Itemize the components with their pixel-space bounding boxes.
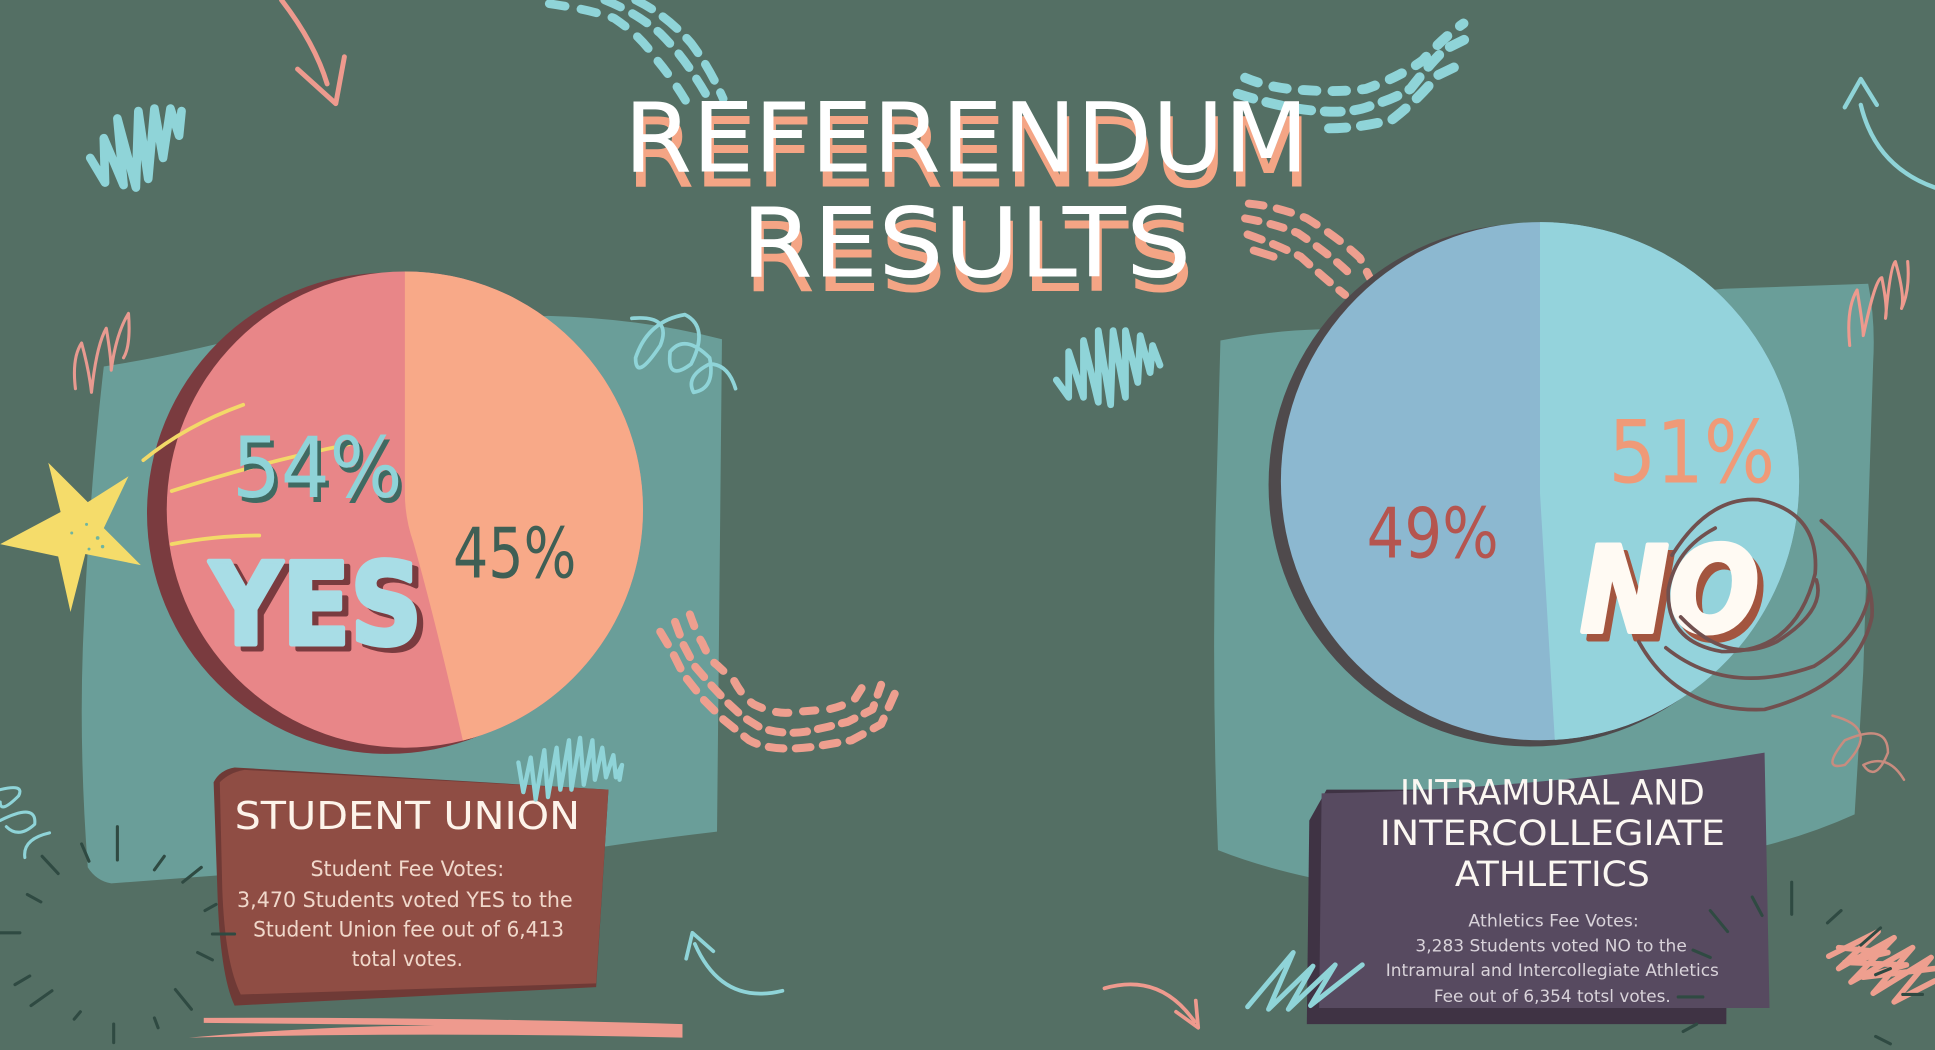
arrow: pink top left	[281, 0, 344, 104]
icon: yellow star	[0, 463, 141, 612]
decoration: pink zigzag right	[1849, 262, 1908, 345]
title: REFERENDUM	[626, 97, 1311, 209]
body text: student union votes	[237, 857, 573, 971]
heading: student union: STUDENT UNION	[235, 795, 580, 839]
label: 54 percent: 54%	[236, 424, 406, 522]
body text: athletics votes: 3,283 Students voted NO to the	[1415, 936, 1687, 956]
label: NO: NO	[1580, 522, 1759, 660]
decoration: teal scribble centre	[1056, 331, 1160, 405]
decoration: yellow speed lines	[143, 405, 349, 544]
decoration: teal dashes right	[1238, 23, 1470, 128]
decoration: teal scribble on box	[518, 738, 622, 800]
label: 49 percent: 49%	[1367, 495, 1499, 575]
body text: athletics votes	[1386, 912, 1719, 1007]
body text: student union votes: Student Fee Votes:	[310, 857, 504, 881]
heading: athletics: INTERCOLLEGIATE	[1380, 814, 1725, 854]
body text: athletics votes: Fee out of 6,354 totsl votes.	[1434, 987, 1671, 1007]
decoration: pink dashes lower left	[660, 614, 896, 749]
decoration: radial ticks left	[0, 827, 235, 1043]
body text: student union votes: Student Union fee out of 6,413	[253, 917, 564, 941]
body text: student union votes: 3,470 Students voted YES to the	[237, 888, 573, 912]
decoration: pink curl right	[1832, 716, 1904, 780]
heading: athletics: INTRAMURAL AND	[1400, 773, 1705, 813]
slice: 45 percent	[405, 271, 643, 741]
decoration: pink zigzag left	[74, 313, 129, 392]
decoration: teal dashes top	[549, 0, 723, 110]
info box: athletics	[1307, 753, 1769, 1024]
decoration: teal curl bottom left	[0, 788, 50, 858]
title	[624, 83, 1311, 314]
title: RESULTS	[744, 202, 1194, 314]
decoration: teal scribble top left	[90, 109, 182, 188]
label: YES: YES	[208, 539, 422, 671]
decoration: pink dashes right	[1245, 204, 1370, 295]
decoration: pink underline	[189, 1018, 682, 1038]
label: 45 percent: 45%	[453, 514, 576, 594]
heading: athletics	[1380, 773, 1725, 895]
title: REFERENDUM	[624, 83, 1309, 195]
label: YES: YES	[214, 544, 428, 676]
decoration: radial ticks right	[1678, 882, 1922, 1044]
panel: left teal backdrop	[82, 316, 722, 883]
decoration: hand-drawn circle around NO	[1639, 499, 1872, 710]
arrow: teal bottom	[686, 933, 782, 994]
decoration: teal curl top	[632, 315, 736, 392]
panel: right teal backdrop	[1214, 284, 1874, 877]
pie chart: athletics	[1269, 222, 1799, 746]
label: 51 percent: 51%	[1608, 403, 1775, 503]
body text: student union votes: total votes.	[352, 947, 463, 971]
label: NO: NO	[1586, 529, 1765, 667]
title: RESULTS	[741, 187, 1191, 299]
heading: athletics: ATHLETICS	[1455, 855, 1650, 895]
decoration: teal zigzag bottom	[1248, 953, 1362, 1009]
info box: student union	[214, 767, 608, 1006]
body text: athletics votes: Intramural and Intercollegiate Athletics	[1386, 961, 1719, 981]
arrow: teal top right	[1845, 79, 1935, 188]
pie chart: student union	[147, 271, 643, 754]
label: 54 percent: 54%	[232, 419, 402, 517]
arrow: pink bottom	[1104, 984, 1198, 1028]
decoration: pink scribble bottom right	[1829, 932, 1935, 1002]
slice: 51 percent	[1540, 222, 1799, 740]
body text: athletics votes: Athletics Fee Votes:	[1468, 912, 1639, 932]
